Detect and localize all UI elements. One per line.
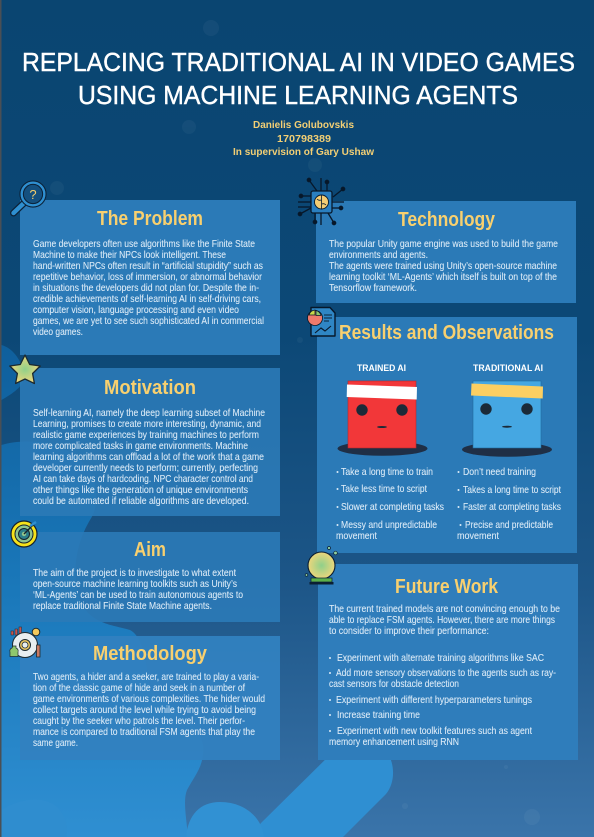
authors bbox=[233, 120, 375, 158]
text: methodology: caught by the seeker who patrols the level. Their perfor- bbox=[33, 716, 245, 727]
text: motivation: Learning, promises to create more interesting, dynamic, and bbox=[33, 419, 261, 430]
list: traditional ai: Takes a long time to script bbox=[463, 485, 561, 496]
authors: In supervision of Gary Ushaw bbox=[233, 147, 375, 158]
text: technology: learning toolkit ‘ML-Agents’ which itself is built on top of the bbox=[329, 272, 557, 283]
panel: future work bbox=[318, 564, 578, 760]
icon: methodology gears bbox=[10, 627, 40, 658]
text: motivation: Self-learning AI, namely the deep learning subset of Machine bbox=[33, 408, 265, 419]
text: the problem: video games. bbox=[33, 327, 83, 338]
text: motivation bbox=[33, 408, 265, 507]
list: traditional ai bbox=[457, 467, 561, 542]
list: future work: memory enhancement using RNN bbox=[329, 737, 459, 748]
icon: brain chip bbox=[298, 178, 345, 225]
text: the problem: repetitive behavior, loss of immersion, or abnormal behavior bbox=[33, 272, 263, 283]
text: methodology: tion of the classic game of hide and seek in a number of bbox=[33, 683, 245, 694]
character: trained ai red cube bbox=[338, 381, 428, 456]
panel: technology bbox=[316, 201, 576, 303]
panel: motivation bbox=[20, 368, 280, 516]
title: REPLACING TRADITIONAL AI IN VIDEO GAMES bbox=[22, 49, 575, 77]
list: trained ai: Take less time to script bbox=[341, 484, 427, 495]
text: motivation: developer currently needs to perform; currently, perfecting bbox=[33, 463, 258, 474]
text: the problem: hand-written NPCs often result in “artificial stupidity” such as bbox=[33, 261, 263, 272]
panel: aim bbox=[20, 532, 280, 622]
list: traditional ai: Precise and predictable bbox=[465, 520, 553, 531]
list: future work bbox=[329, 653, 556, 748]
text: the problem: Game developers often use algorithms like the Finite State bbox=[33, 239, 255, 250]
text: future work intro: to consider to improve their performance: bbox=[329, 626, 489, 637]
list: trained ai: Slower at completing tasks bbox=[341, 502, 444, 513]
icon: magnifying glass bbox=[14, 181, 46, 213]
text: motivation: more complicated tasks in game environments. Machine bbox=[33, 441, 248, 452]
list: future work: Experiment with new toolkit features such as agent bbox=[337, 726, 532, 737]
text: aim: replace traditional Finite State Machine agents. bbox=[33, 601, 212, 612]
icon: report document bbox=[308, 308, 335, 336]
panel: the problem bbox=[20, 200, 280, 355]
text: technology: The agents were trained using Unity’s open-source machine bbox=[329, 261, 557, 272]
text: the problem: in situations the developers did not plan for. Despite the in- bbox=[33, 283, 259, 294]
text: methodology: collect targets around the level while trying to avoid being bbox=[33, 705, 256, 716]
text: the problem: credible achievements of self-learning AI in self-driving cars, bbox=[33, 294, 261, 305]
text: technology: The popular Unity game engine was used to build the game bbox=[329, 239, 558, 250]
text: motivation: could be automated if reliable algorithms are developed. bbox=[33, 496, 249, 507]
text: aim: ‘ML-Agents’ can be used to train autonomous agents to bbox=[33, 590, 243, 601]
panel: methodology bbox=[20, 636, 280, 760]
heading: aim: Aim bbox=[134, 539, 166, 561]
list: trained ai: movement bbox=[336, 531, 377, 542]
text: technology: Tensorflow framework. bbox=[329, 283, 417, 294]
heading: the problem: The Problem bbox=[97, 208, 203, 230]
list: future work: Add more sensory observations to the agents such as ray- bbox=[336, 668, 556, 679]
list: future work: cast sensors for obstacle detection bbox=[329, 679, 459, 690]
text: the problem: games, we are yet to see such sophisticated AI in commercial bbox=[33, 316, 264, 327]
authors: Danielis Golubovskis bbox=[253, 120, 354, 131]
list: future work: Experiment with different hyperparameters tunings bbox=[336, 695, 532, 706]
label: trained ai: TRAINED AI bbox=[357, 363, 406, 374]
heading: results: Results and Observations bbox=[339, 322, 554, 344]
list: trained ai bbox=[336, 467, 444, 542]
title bbox=[22, 49, 575, 110]
text: future work intro bbox=[329, 604, 560, 637]
character: traditional ai blue cube bbox=[462, 381, 552, 457]
text: motivation: learning algorithms can offload a lot of the work that a game bbox=[33, 452, 264, 463]
icon: target bbox=[11, 521, 37, 547]
text: methodology: same game. bbox=[33, 738, 78, 749]
list: trained ai: Messy and unpredictable bbox=[341, 520, 437, 531]
text: technology: environments and agents. bbox=[329, 250, 428, 261]
text: methodology: Two agents, a hider and a seeker, are trained to play a varia- bbox=[33, 672, 259, 683]
icon: crystal ball bbox=[305, 546, 337, 584]
panel: results and observations bbox=[317, 317, 577, 553]
text: methodology bbox=[33, 672, 265, 749]
heading: future work: Future Work bbox=[395, 576, 499, 598]
text: aim bbox=[33, 568, 243, 612]
text: motivation: AI can take days of hardcoding. NPC character control and bbox=[33, 474, 253, 485]
heading: motivation: Motivation bbox=[104, 377, 196, 399]
list: traditional ai: movement bbox=[457, 531, 499, 542]
text: methodology: game environments of various complexities. The hider would bbox=[33, 694, 265, 705]
list: future work: Experiment with alternate training algorithms like SAC bbox=[337, 653, 544, 664]
heading: technology: Technology bbox=[398, 209, 496, 231]
title: USING MACHINE LEARNING AGENTS bbox=[78, 82, 518, 110]
list: future work: Increase training time bbox=[337, 710, 420, 721]
list: trained ai: Take a long time to train bbox=[341, 467, 433, 478]
text: aim: The aim of the project is to investigate to what extent bbox=[33, 568, 236, 579]
text: the problem: Machine to make their NPCs look intelligent. These bbox=[33, 250, 226, 261]
heading: methodology: Methodology bbox=[93, 643, 208, 665]
text: methodology: mance is compared to traditional FSM agents that play the bbox=[33, 727, 255, 738]
list: traditional ai: Don’t need training bbox=[463, 467, 536, 478]
text: motivation: other things like the generation of unique environments bbox=[33, 485, 248, 496]
icon: star bbox=[10, 355, 40, 384]
label: traditional ai: TRADITIONAL AI bbox=[473, 363, 543, 374]
text: the problem bbox=[33, 239, 264, 338]
text: technology bbox=[329, 239, 558, 294]
icon: magnifying glass: ? bbox=[29, 187, 37, 202]
text: future work intro: able to replace FSM agents. However, there are more things bbox=[329, 615, 555, 626]
authors: 170798389 bbox=[277, 134, 331, 145]
text: the problem: computer vision, language processing and even video bbox=[33, 305, 239, 316]
list: traditional ai: Faster at completing tasks bbox=[463, 502, 561, 513]
text: motivation: realistic game experiences by training machines to perform bbox=[33, 430, 259, 441]
text: future work intro: The current trained models are not convincing enough to be bbox=[329, 604, 560, 615]
text: aim: open-source machine learning toolkits such as Unity’s bbox=[33, 579, 237, 590]
